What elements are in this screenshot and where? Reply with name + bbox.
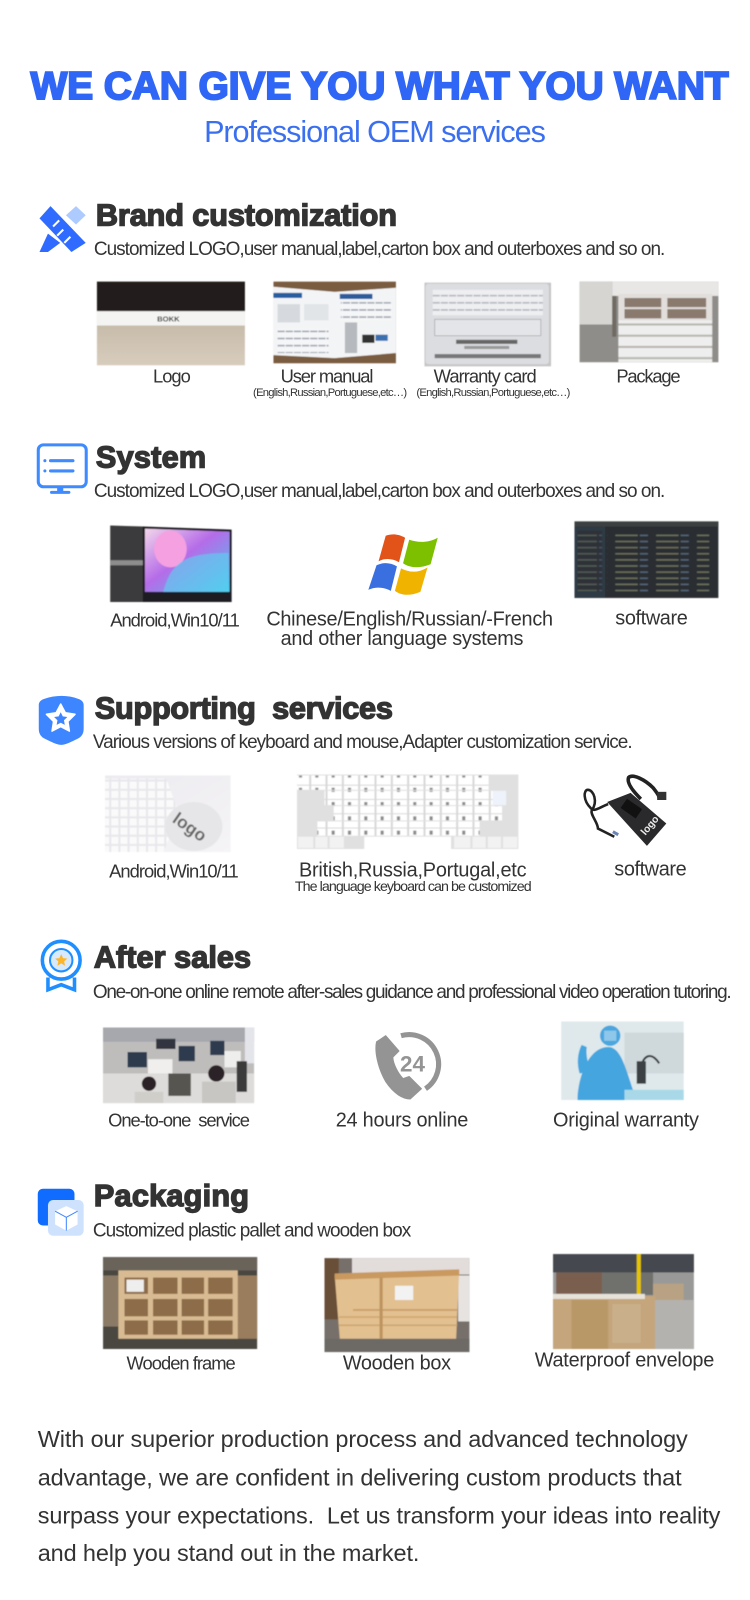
photo: portable monitor bbox=[110, 526, 232, 602]
caption: language systems: Chinese/English/Russian/-French bbox=[266, 609, 553, 631]
caption: 24 hours online: 24 hours online bbox=[336, 1110, 468, 1132]
photo: logo bbox=[97, 282, 245, 365]
icon: award ribbon bbox=[42, 941, 80, 990]
caption: android windows: Android,Win10/11 bbox=[109, 861, 239, 882]
photo: wooden frame bbox=[103, 1257, 257, 1349]
photo: keyboard and mouse bbox=[105, 776, 231, 852]
panel: packaging bbox=[38, 1179, 714, 1374]
icon: box cards bbox=[38, 1189, 84, 1236]
photo: warehouse bbox=[553, 1254, 694, 1349]
heading: packaging: Packaging bbox=[94, 1179, 249, 1213]
photo: wooden box bbox=[324, 1258, 469, 1352]
description: packaging: Customized plastic pallet and wooden box bbox=[93, 1221, 412, 1242]
caption: language systems: and other language systems bbox=[281, 628, 524, 650]
caption: keyboard languages: British,Russia,Portugal,etc bbox=[299, 860, 527, 882]
icon: monitor list bbox=[38, 445, 86, 494]
caption: one-to-one service: One-to-one service bbox=[108, 1110, 250, 1131]
photo: power adapter: logo bbox=[639, 814, 662, 838]
photo: warranty card bbox=[424, 283, 551, 366]
heading: brand customization: Brand customization bbox=[96, 199, 397, 233]
description: supporting services: Various versions of keyboard and mouse,Adapter customization service. bbox=[93, 732, 633, 753]
heading: supporting services: Supporting services bbox=[95, 691, 393, 725]
note: user manual languages: (English,Russian,Portuguese,etc…) bbox=[253, 387, 407, 399]
icon: shield star bbox=[39, 696, 84, 745]
caption: wooden frame: Wooden frame bbox=[127, 1352, 236, 1373]
closing paragraph: and help you stand out in the market. bbox=[38, 1540, 419, 1566]
icon: 24 hour phone: 24 bbox=[400, 1051, 425, 1076]
photo: power adapter bbox=[585, 776, 666, 846]
caption: software: software bbox=[614, 859, 687, 881]
icon: ruler and pencil bbox=[39, 206, 86, 252]
caption: android windows: Android,Win10/11 bbox=[110, 610, 240, 631]
photo: code screenshot bbox=[574, 521, 718, 598]
note: warranty card languages: (English,Russian,Portuguese,etc…) bbox=[416, 387, 571, 399]
panel: system bbox=[38, 440, 718, 650]
panel: supporting services bbox=[39, 691, 687, 895]
caption: logo: Logo bbox=[153, 366, 191, 387]
panel: brand customization bbox=[39, 199, 718, 399]
caption: wooden box: Wooden box bbox=[343, 1352, 451, 1374]
caption: waterproof envelope: Waterproof envelope bbox=[535, 1349, 714, 1371]
photo: logo: BOKK bbox=[157, 314, 180, 323]
closing paragraph: With our superior production process and advanced technology bbox=[38, 1426, 688, 1452]
description: brand customization: Customized LOGO,user manual,label,carton box and outerboxes and so on. bbox=[94, 239, 665, 260]
diagram: language keyboard layout bbox=[297, 774, 518, 849]
closing paragraph bbox=[38, 1426, 721, 1566]
icon: 24 hour phone bbox=[376, 1035, 439, 1099]
title: WE CAN GIVE YOU WHAT YOU WANT bbox=[31, 65, 729, 108]
note: keyboard customization: The language keyboard can be customized bbox=[295, 879, 532, 895]
heading: after sales: After sales bbox=[94, 940, 251, 974]
caption: package: Package bbox=[616, 366, 681, 387]
description: system: Customized LOGO,user manual,label,carton box and outerboxes and so on. bbox=[94, 481, 665, 502]
icon: windows flag bbox=[368, 534, 438, 595]
caption: language systems bbox=[266, 609, 553, 650]
photo: support office bbox=[103, 1028, 254, 1103]
subtitle: Professional OEM services bbox=[204, 115, 546, 149]
photo: cleanroom worker bbox=[561, 1021, 684, 1100]
photo: user manual bbox=[273, 282, 396, 363]
panel: after sales bbox=[42, 940, 732, 1132]
closing paragraph: surpass your expectations. Let us transform your ideas into reality bbox=[38, 1502, 721, 1528]
heading: system: System bbox=[96, 440, 206, 474]
description: after sales: One-on-one online remote after-sales guidance and professional video operation tutoring. bbox=[93, 982, 732, 1003]
caption: software: software bbox=[615, 607, 688, 629]
caption: user manual: User manual bbox=[281, 366, 373, 387]
caption: warranty card: Warranty card bbox=[434, 366, 537, 387]
caption: original warranty: Original warranty bbox=[553, 1110, 699, 1132]
photo: package bbox=[580, 282, 718, 362]
closing paragraph: advantage, we are confident in delivering custom products that bbox=[38, 1465, 682, 1491]
photo: keyboard and mouse: logo bbox=[169, 808, 211, 846]
